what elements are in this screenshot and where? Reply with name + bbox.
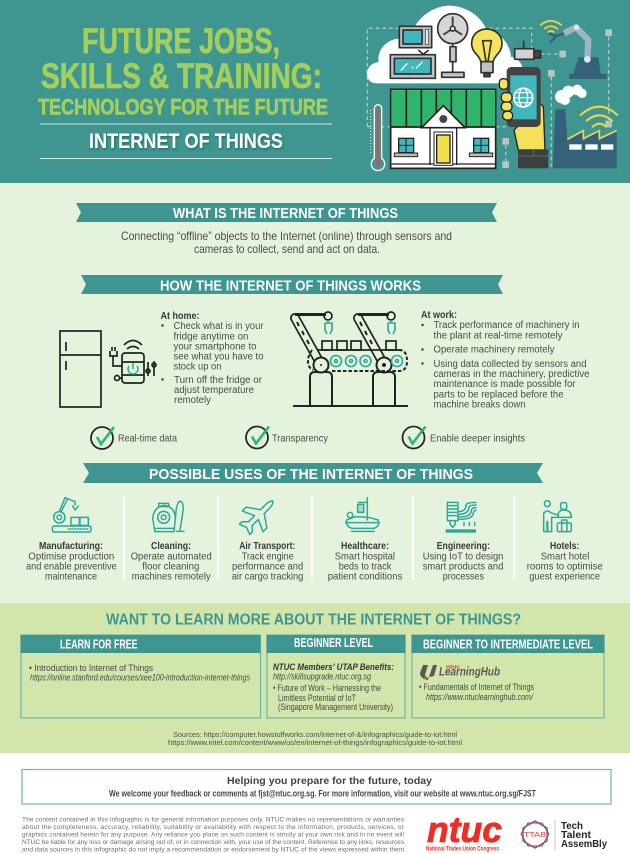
panel: beginner level: http://skillsupgrade.ntuc.org.sg — [273, 672, 372, 682]
dashed connectors — [367, 28, 609, 167]
text block: at home — [160, 311, 264, 406]
panel: beginner level: (Singapore Management University) — [278, 702, 393, 713]
icon: airplane — [234, 491, 283, 540]
use: air transport — [232, 491, 303, 582]
icon: microwave — [399, 26, 432, 48]
text block: at work: At work: — [421, 310, 457, 321]
icon: robot arm — [548, 25, 607, 79]
text block: definition: cameras to collect, send and act on data. — [194, 242, 380, 256]
use: cleaning: machines remotely — [132, 572, 211, 582]
text block: at work: the plant at real-time remotely — [434, 330, 562, 342]
use: manufacturing: and enable preventive — [26, 562, 117, 572]
title — [38, 22, 328, 120]
text block: at work: Using data collected by sensors and — [434, 359, 586, 370]
text block: at work: machine breaks down — [434, 400, 526, 410]
logo: tech talent assembly: Talent — [561, 830, 592, 841]
text block: disclaimer — [22, 816, 406, 854]
use: healthcare — [328, 498, 402, 582]
benefit: transparency: Transparency — [272, 434, 328, 444]
icon: wifi signal small — [541, 21, 561, 32]
text block: at home: At home: — [160, 311, 200, 322]
heading: want to learn more: WANT TO LEARN MORE ABOUT THE INTERNET OF THINGS? — [106, 612, 521, 628]
use: engineering: smart products and — [423, 562, 503, 572]
use: healthcare: patient conditions — [328, 572, 402, 582]
use: air transport: Air Transport: — [239, 541, 295, 552]
logo: tech talent assembly: TTAB — [524, 830, 546, 839]
use: healthcare: Smart hospital — [335, 552, 395, 562]
use: healthcare: Healthcare: — [341, 541, 389, 552]
text block: at work: maintenance is made possible for — [434, 379, 576, 390]
logo: ntuc: National Trades Union Congress — [426, 846, 500, 852]
text block: disclaimer: NTUC be liable for any loss or damage arising out of, or in connection with, your use of the content. Reference to any links, resources — [22, 839, 405, 846]
use: manufacturing: Manufacturing: — [39, 541, 103, 552]
benefit: transparency — [246, 426, 328, 448]
heading: possible uses of the internet of things: POSSIBLE USES OF THE INTERNET OF THINGS — [149, 466, 473, 483]
panel: beginner to intermediate level: • Fundamentals of Internet of Things — [419, 682, 534, 693]
use: engineering: Engineering: — [437, 541, 490, 552]
benefit: enable deeper insights — [402, 426, 525, 448]
use: cleaning: floor cleaning — [142, 562, 199, 572]
use: engineering — [423, 502, 503, 582]
heading: how the internet of things works: HOW THE INTERNET OF THINGS WORKS — [160, 278, 421, 294]
panel: learn for free: LEARN FOR FREE — [60, 636, 138, 652]
icon: television — [390, 50, 435, 78]
text block: at home: your smartphone to — [174, 342, 257, 352]
heading: how the internet of things works — [81, 275, 503, 294]
use: air transport: performance and — [232, 562, 303, 572]
title: SKILLS & TRAINING: — [41, 57, 322, 96]
text block: at home: fridge anytime on — [174, 332, 248, 342]
use: cleaning: Cleaning: — [151, 541, 191, 552]
text block: at work: Track performance of machinery in — [434, 320, 580, 331]
text block: sources — [168, 730, 462, 747]
use: hotels: Hotels: — [550, 541, 579, 552]
title: TECHNOLOGY FOR THE FUTURE — [38, 94, 328, 120]
text block: disclaimer: about the completeness, accuracy, reliability, suitability or availability with respect to the information, products, services, or — [22, 824, 405, 831]
icon: smart plug controller — [110, 340, 156, 383]
text block: at home: Turn off the fridge or — [174, 375, 263, 386]
icon: fridge — [60, 331, 101, 407]
icon: hotel reception — [544, 501, 572, 532]
use: hotels — [527, 501, 603, 582]
text block: disclaimer: and data sources in this infographic do not imply a recommendation or endorsement by NTUC of the views expressed within them. — [22, 846, 406, 854]
logo: ntuc learninghub: LearningHub — [439, 664, 500, 678]
panel: beginner level: NTUC Members’ UTAP Benefits: — [273, 662, 394, 672]
icon: factory — [553, 85, 617, 168]
use: manufacturing: Optimise production — [28, 552, 114, 562]
use: healthcare: beds to track — [339, 562, 392, 572]
use: engineering: Using IoT to design — [423, 552, 503, 562]
panel: learn for free: • Introduction to Internet of Things — [29, 663, 153, 674]
subtitle: internet of things: INTERNET OF THINGS — [89, 130, 283, 153]
panel: feedback box: Helping you prepare for the future, today — [227, 775, 432, 787]
panel: beginner level: Limitless Potential of IoT — [278, 693, 356, 704]
icon: hand holding smartphone — [499, 67, 548, 168]
use: hotels: Smart hotel — [541, 552, 589, 562]
icon: camera — [515, 41, 541, 59]
benefit: real-time data: Real-time data — [118, 434, 177, 444]
illustration: connected home and industry — [367, 6, 617, 171]
title: FUTURE JOBS, — [82, 22, 280, 61]
text block: at home: stock up on — [174, 362, 222, 372]
text block: at work: Operate machinery remotely — [434, 344, 554, 356]
text block: at work — [421, 310, 590, 410]
text block: disclaimer: graphics contained herein for any purpose. Any reliance you place on such content is strictly at your own risk and in no event will — [22, 832, 405, 838]
panel: beginner level: BEGINNER LEVEL — [294, 635, 373, 650]
heading: what is the internet of things — [76, 203, 497, 222]
icon: robot arms on conveyor — [293, 312, 408, 406]
icon: light bulb — [472, 29, 502, 77]
text block: definition — [121, 229, 452, 256]
panel: learn for free — [20, 635, 260, 718]
icon: floor cleaning machine — [153, 501, 184, 532]
icon: thermometer — [371, 105, 385, 171]
panel: beginner level — [266, 635, 406, 718]
heading: possible uses of the internet of things — [83, 463, 543, 483]
icon: house — [391, 89, 496, 168]
text block: disclaimer: The content contained in this infographic is for general information purposes only. NTUC makes no representations or warranties — [22, 816, 405, 824]
text block: definition: Connecting “offline” objects to the Internet (online) through sensors and — [121, 229, 452, 243]
panel: learn for free: https://online.stanford.edu/courses/xee100-introduction-internet-things — [30, 672, 250, 684]
logo: ntuc learninghub — [420, 664, 500, 680]
use: cleaning — [131, 501, 212, 582]
use: manufacturing: maintenance — [45, 572, 97, 582]
text block: at home: remotely — [174, 395, 211, 406]
grey nodes — [502, 29, 612, 168]
logo: tech talent assembly: Tech — [561, 821, 583, 832]
panel: header — [0, 0, 630, 183]
logo: ntuc learninghub: ntuc — [446, 664, 460, 670]
icon: industrial robot — [52, 498, 91, 532]
use: cleaning: Operate automated — [131, 552, 212, 562]
panel: beginner to intermediate level — [412, 635, 604, 718]
icon: cloud — [367, 6, 523, 83]
heading: what is the internet of things: WHAT IS THE INTERNET OF THINGS — [173, 205, 398, 222]
panel: beginner to intermediate level: https://www.ntuclearninghub.com/ — [426, 692, 534, 703]
benefit: enable deeper insights: Enable deeper insights — [430, 434, 525, 444]
text block: at home: adjust temperature — [174, 385, 254, 396]
use: engineering: processes — [443, 572, 484, 582]
icon: 3D printer — [446, 502, 476, 533]
icon: fan — [438, 14, 468, 77]
benefit: real-time data — [91, 427, 177, 449]
use: air transport: Track engine — [242, 552, 294, 562]
logo: tech talent assembly — [521, 820, 608, 850]
icon: hospital bed — [346, 498, 379, 531]
column separators — [123, 496, 515, 580]
text block: sources: Sources: https://computer.howstuffworks.com/internet-of-&/infographics/guide-to-iot.html — [173, 730, 457, 739]
text block: at home: see what you have to — [174, 352, 264, 362]
use: hotels: rooms to optimise — [527, 562, 603, 572]
logo: tech talent assembly: AssemBly — [561, 839, 608, 850]
use: hotels: guest experience — [529, 572, 600, 582]
panel: beginner level: • Future of Work – Harnessing the — [273, 683, 381, 694]
text block: at work: parts to be replaced before the — [434, 390, 564, 400]
text block: sources: https://www.intel.com/content/www/us/en/internet-of-things/infographics/guide-to-iot.html — [168, 738, 462, 747]
panel: feedback box — [22, 770, 611, 804]
logo: ntuc: ntuc — [427, 809, 502, 850]
text block: at home: Check what is in your — [174, 321, 264, 332]
text block: at work: cameras in the machinery, predictive — [434, 369, 590, 380]
use: manufacturing — [26, 498, 117, 582]
use: air transport: air cargo tracking — [232, 572, 303, 582]
